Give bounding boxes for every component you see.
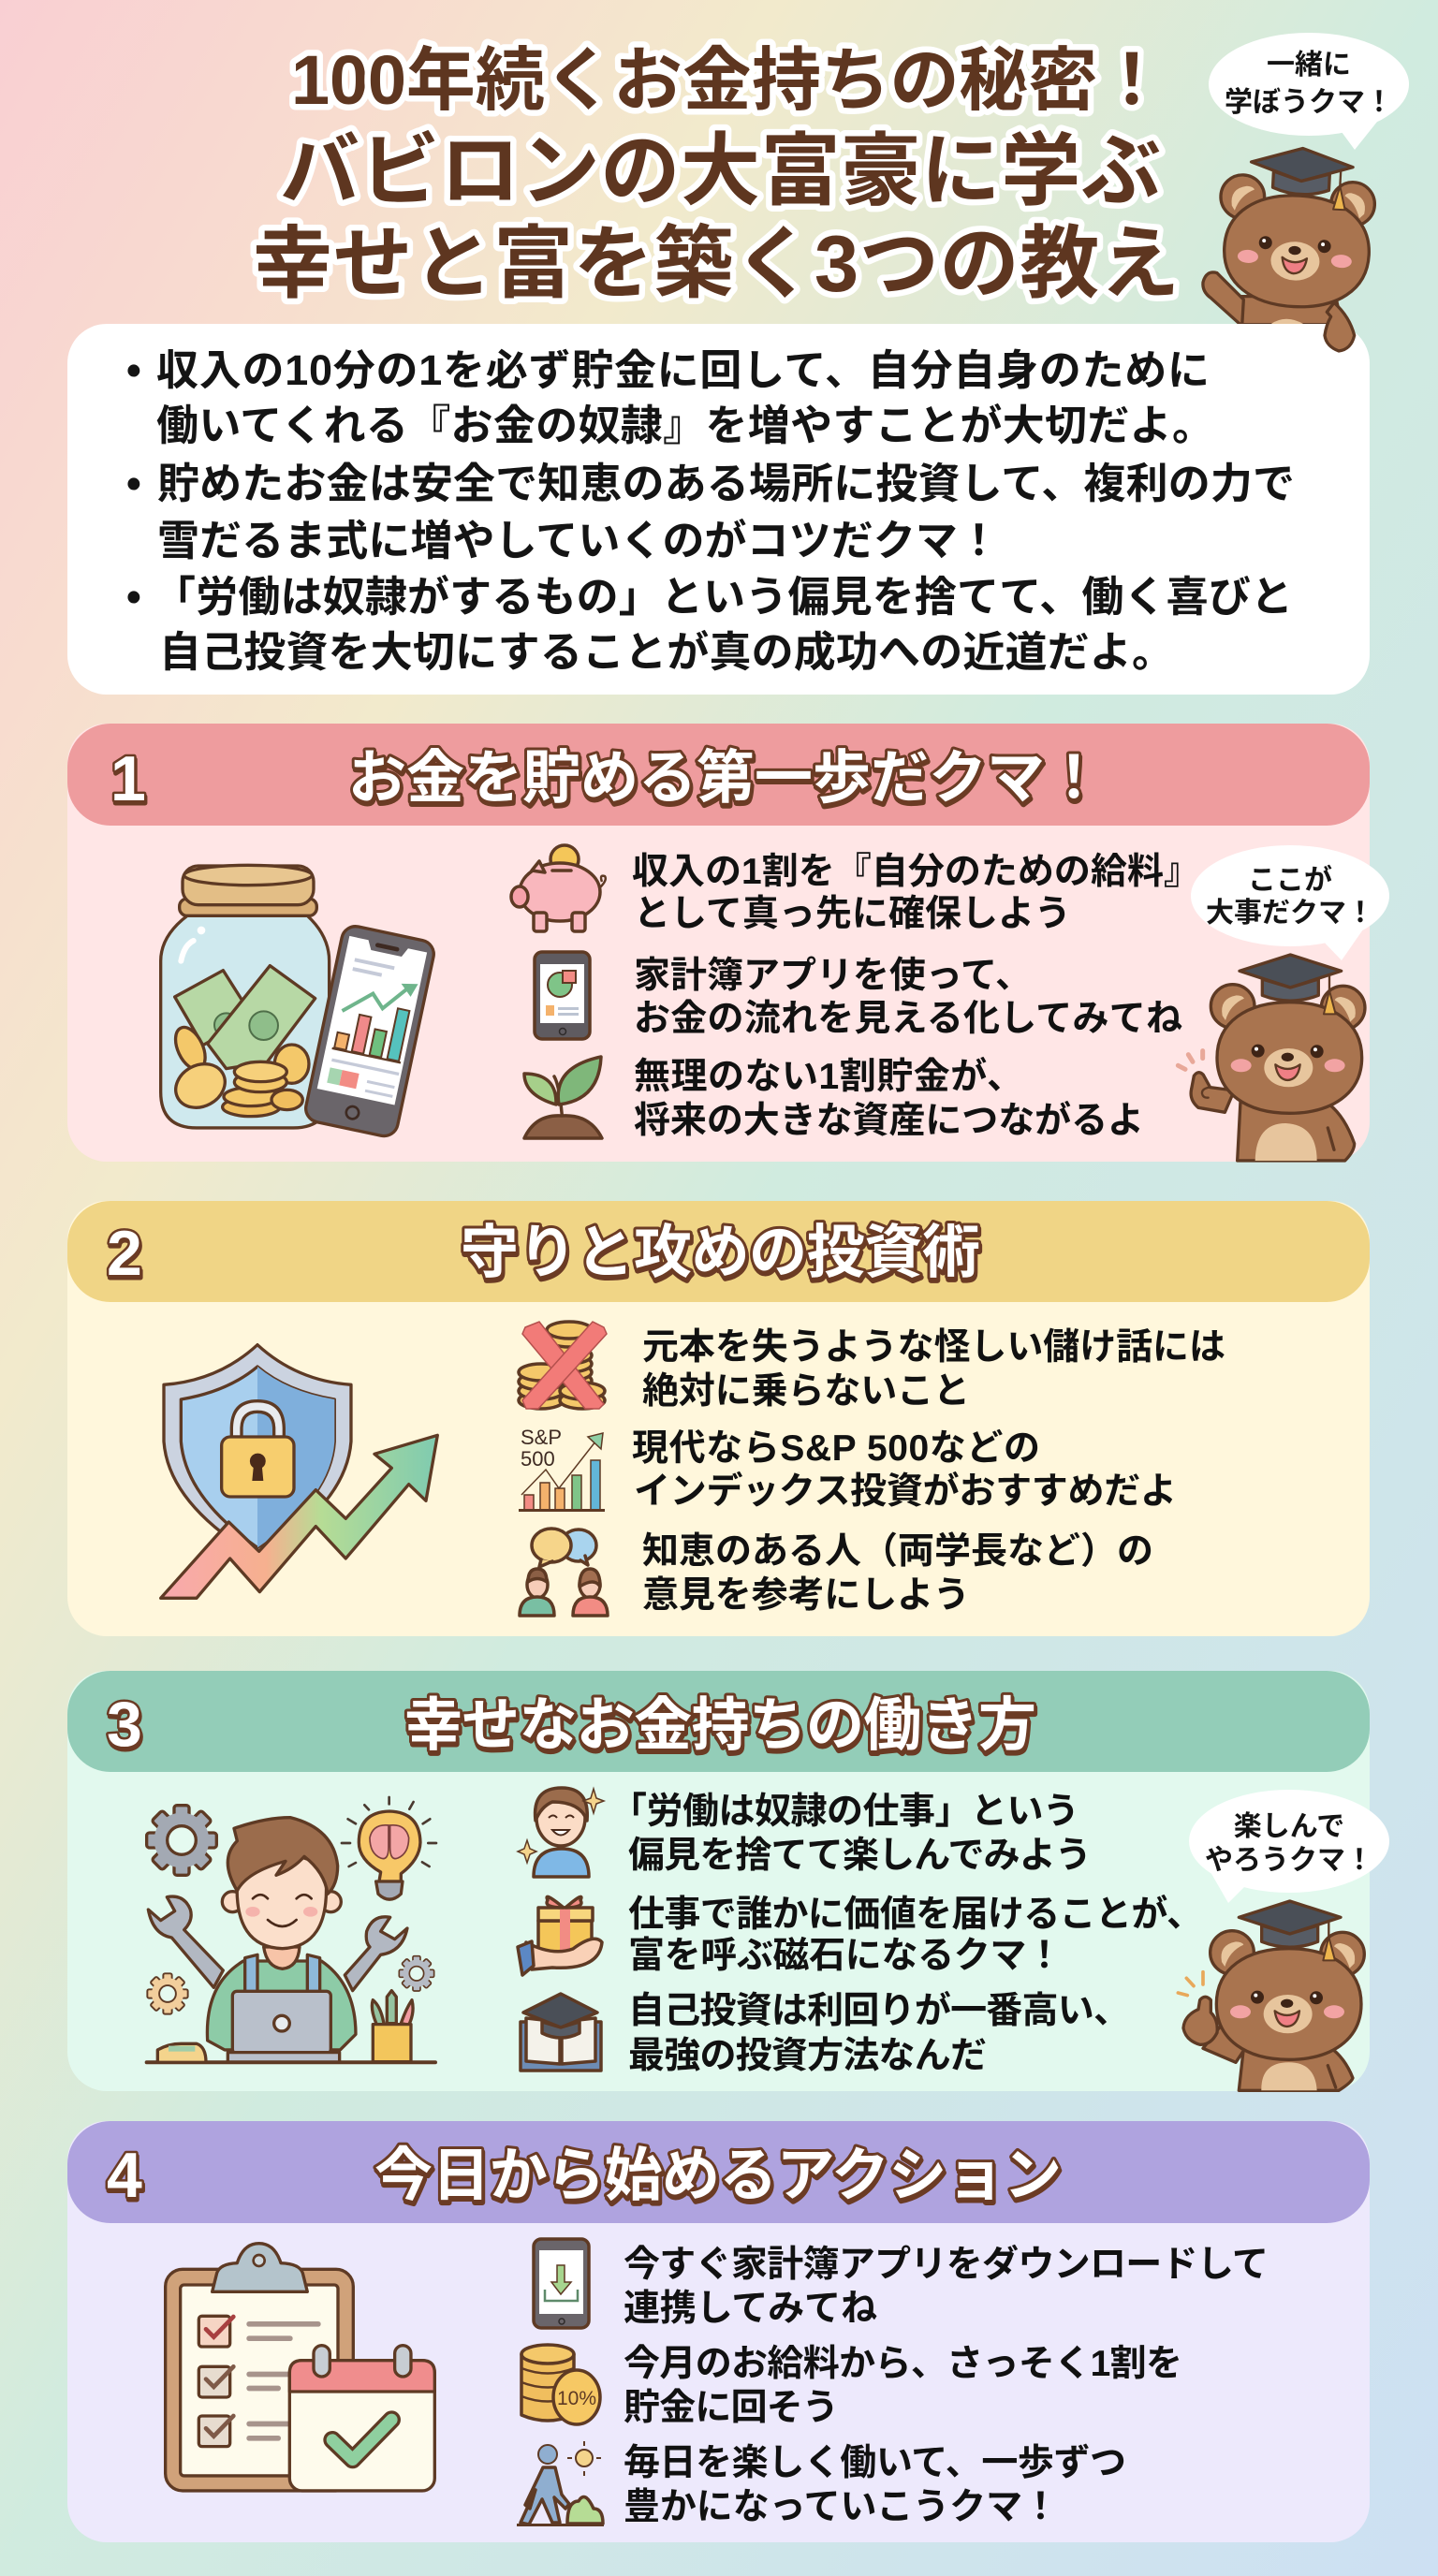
icon: gift in hand <box>518 1896 602 1975</box>
bear 3 belly <box>1261 2062 1317 2090</box>
summary panel: • <box>126 460 141 507</box>
section 3 text: item 2 <box>628 1895 1203 1976</box>
section 1 header: お金を貯める第一歩だクマ！ <box>348 746 1103 811</box>
summary panel: 「労働は奴隷がするもの」という偏見を捨てて、働く喜びと <box>154 573 1293 621</box>
section 4 header: 4 <box>107 2140 142 2211</box>
speech bubble: section 3 <box>1189 1790 1389 1903</box>
section 4 text: item 2 <box>624 2344 1182 2428</box>
icon: smiling person <box>518 1788 604 1877</box>
icon: book and graduation cap <box>521 1994 601 2071</box>
section 2 text: item 2: インデックス投資がおすすめだよ <box>634 1471 1177 1512</box>
speech bubble: top <box>1209 33 1409 150</box>
panel: section 1 <box>67 724 1370 1162</box>
section 3 header: 3 <box>107 1689 142 1760</box>
icon: S&P 500 chart: S&P <box>521 1426 562 1449</box>
summary panel: 自己投資を大切にすることが真の成功への近道だよ。 <box>159 628 1174 676</box>
speech bubble: section 1: ここが <box>1248 864 1332 896</box>
summary panel: • <box>126 346 141 394</box>
section 3 text: item 3: 最強の投資方法なんだ <box>628 2036 987 2076</box>
illustration: shield and arrow <box>161 1345 437 1598</box>
bear 2 arm <box>1191 1073 1234 1112</box>
bear 1 belly <box>1270 319 1304 325</box>
section 2 text: item 1: 元本を失うような怪しい儲け話には <box>642 1327 1225 1368</box>
section 4 header <box>67 2121 1370 2223</box>
section 4 header: 今日から始めるアクション <box>374 2144 1062 2208</box>
speech bubble: section 1: 大事だクマ！ <box>1206 898 1374 929</box>
bear 2 belly <box>1255 1123 1317 1161</box>
bear 3 emphasis marks <box>1178 1972 1203 1996</box>
illustration: clipboard and calendar <box>166 2244 434 2491</box>
icon: coins 10 percent: 10% <box>557 2388 596 2409</box>
icon: piggy bank <box>511 845 606 931</box>
icon: walking person <box>517 2441 604 2526</box>
icon: people chatting <box>520 1529 608 1616</box>
summary panel: 雪だるま式に増やしていくのがコツだクマ！ <box>157 517 1000 564</box>
icon: S&P 500 chart <box>519 1426 605 1512</box>
speech bubble: section 3: 楽しんで <box>1234 1811 1344 1842</box>
section 1 text: item 1: として真っ先に確保しよう <box>634 894 1071 934</box>
bear 2 body <box>1238 1102 1355 1161</box>
section 4 text: item 1 <box>624 2245 1269 2329</box>
section 2 text: item 2 <box>632 1428 1177 1512</box>
bear 3 thumb-up arm <box>1203 2027 1245 2062</box>
speech bubble: top: 学ぼうクマ！ <box>1225 87 1393 118</box>
title: 幸せと富を築く3つの教え <box>253 220 1180 309</box>
icon: coins crossed out <box>519 1322 607 1409</box>
summary panel <box>67 324 1370 695</box>
bear mascot: section 3 <box>1178 1901 1364 2090</box>
section 3 text: item 2: 仕事で誰かに価値を届けることが、 <box>628 1895 1203 1935</box>
bear 1 waving arm <box>1203 272 1243 326</box>
speech bubble: top: 一緒に <box>1267 50 1351 80</box>
summary panel: 貯めたお金は安全で知恵のある場所に投資して、複利の力で <box>157 460 1295 507</box>
section 4 text: item 2: 今月のお給料から、さっそく1割を <box>624 2344 1182 2384</box>
section 3 text: item 3: 自己投資は利回りが一番高い、 <box>628 1991 1130 2031</box>
section 3 text: item 3 <box>628 1991 1130 2076</box>
title <box>253 41 1180 309</box>
section 1 text: item 3 <box>634 1057 1144 1141</box>
section 3 header <box>67 1671 1370 1772</box>
section 1 text: item 1 <box>632 852 1200 934</box>
icon: phone with pie chart <box>535 952 590 1039</box>
panel: section 4 <box>67 2121 1370 2542</box>
illustration: happy worker <box>147 1797 436 2062</box>
section 1 text: item 1: 収入の1割を『自分のための給料』 <box>632 852 1200 892</box>
section 2 header: 守りと攻めの投資術 <box>461 1221 980 1285</box>
title: バビロンの大富豪に学ぶ <box>280 127 1161 216</box>
section 4 text: item 2: 貯金に回そう <box>624 2388 839 2428</box>
section 2 header <box>67 1201 1370 1302</box>
illustration: savings jar and phone <box>161 865 436 1138</box>
section 1 text: item 2: お金の流れを見える化してみてね <box>634 999 1182 1039</box>
icon: sprout <box>524 1057 602 1138</box>
section 1 text: item 2: 家計簿アプリを使って、 <box>634 956 1032 996</box>
summary panel: • <box>126 573 141 621</box>
section 2 header: 2 <box>107 1218 142 1289</box>
speech bubble: section 3: やろうクマ！ <box>1205 1845 1373 1876</box>
section 1 text: item 2 <box>634 956 1182 1039</box>
section 2 text: item 3 <box>642 1531 1153 1616</box>
icon: phone download <box>534 2239 589 2328</box>
bear 1 paw over panel <box>1325 302 1355 351</box>
section 4 text: item 3: 豊かになっていこうクマ！ <box>624 2487 1059 2527</box>
section 2 text: item 1: 絶対に乗らないこと <box>642 1371 970 1412</box>
panel: section 2 <box>67 1201 1370 1636</box>
bear 2 emphasis marks <box>1178 1051 1203 1069</box>
section 2 text: item 2: 現代ならS&P 500などの <box>632 1428 1040 1469</box>
summary panel: 収入の10分の1を必ず貯金に回して、自分自身のために <box>156 346 1210 394</box>
section 1 text: item 3: 無理のない1割貯金が、 <box>634 1057 1023 1097</box>
section 3 header: 幸せなお金持ちの働き方 <box>404 1693 1036 1758</box>
panel: section 3 <box>67 1671 1370 2091</box>
icon: S&P 500 chart: 500 <box>521 1447 555 1471</box>
summary panel: 働いてくれる『お金の奴隷』を増やすことが大切だよ。 <box>156 402 1214 449</box>
section 4 text: item 1: 連携してみてね <box>624 2289 877 2329</box>
section 4 text: item 1: 今すぐ家計簿アプリをダウンロードして <box>624 2245 1269 2285</box>
bear 1 body <box>1239 297 1342 325</box>
section 4 text: item 3: 毎日を楽しく働いて、一歩ずつ <box>624 2443 1126 2483</box>
section 1 text: item 3: 将来の大きな資産につながるよ <box>634 1101 1144 1141</box>
section 2 text: item 3: 知恵のある人（両学長など）の <box>642 1531 1153 1572</box>
section 3 text: item 1: 偏見を捨てて楽しんでみよう <box>628 1836 1092 1876</box>
section 2 text: item 1 <box>642 1327 1225 1412</box>
icon: coins 10 percent <box>521 2345 600 2424</box>
bear mascot: top <box>1203 144 1377 326</box>
bear 3 body <box>1239 2047 1353 2090</box>
section 3 text: item 1: 「労働は奴隷の仕事」という <box>610 1792 1079 1832</box>
section 1 header: 1 <box>110 743 146 814</box>
speech bubble: section 1 <box>1191 845 1389 960</box>
title: 100年続くお金持ちの秘密！ <box>291 41 1167 119</box>
bear mascot: section 1 <box>1178 955 1365 1161</box>
section 4 text: item 3 <box>624 2443 1126 2527</box>
section 1 header <box>67 724 1370 826</box>
section 3 text: item 1 <box>610 1792 1092 1876</box>
section 2 text: item 3: 意見を参考にしよう <box>642 1575 970 1616</box>
section 3 text: item 2: 富を呼ぶ磁石になるクマ！ <box>628 1936 1063 1976</box>
